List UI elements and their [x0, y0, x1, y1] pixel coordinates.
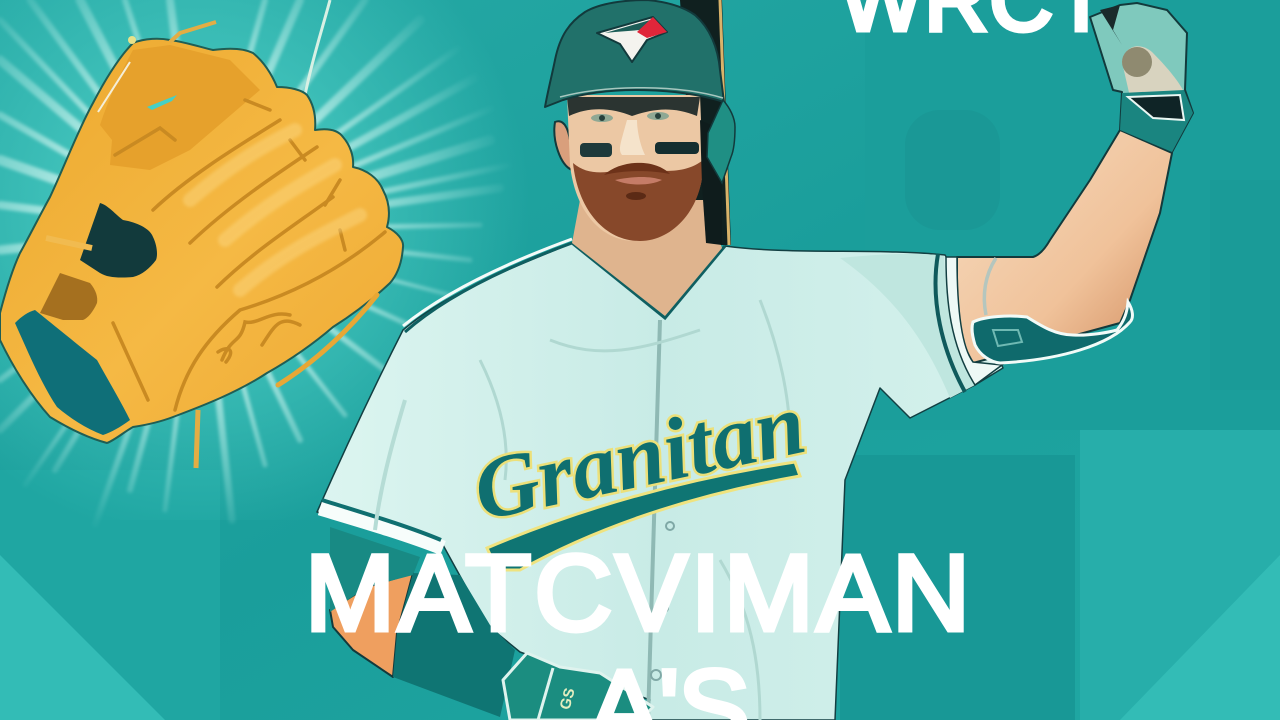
- glove strap: [278, 295, 377, 385]
- head: [567, 95, 703, 241]
- left sleeve inner: [330, 527, 420, 612]
- jersey swoosh: [487, 462, 800, 570]
- batting helmet: [545, 0, 735, 183]
- batting glove: [1090, 3, 1193, 152]
- lower batting glove: GS: [557, 686, 579, 712]
- neck: [572, 200, 722, 316]
- bat: [680, 0, 731, 245]
- hair and strap beside face: [700, 120, 722, 245]
- glove webbing: [100, 45, 260, 170]
- main title: MATCVIMAN: [305, 532, 970, 653]
- jersey wordmark: Granitan: [466, 375, 813, 540]
- raised arm: [946, 130, 1172, 385]
- left arm skin: [330, 573, 413, 677]
- glove finger hole: [80, 203, 157, 278]
- player: [317, 0, 1193, 720]
- lower batting glove: [503, 653, 653, 720]
- wrist band: [393, 573, 515, 717]
- arm band: [972, 302, 1132, 363]
- ear: [554, 121, 572, 170]
- helmet logo: [597, 17, 667, 62]
- light burst behind glove: [0, 0, 510, 525]
- glove pocket lining: [15, 310, 130, 435]
- icon: baseball glove: [0, 0, 403, 468]
- jersey: [317, 239, 1003, 720]
